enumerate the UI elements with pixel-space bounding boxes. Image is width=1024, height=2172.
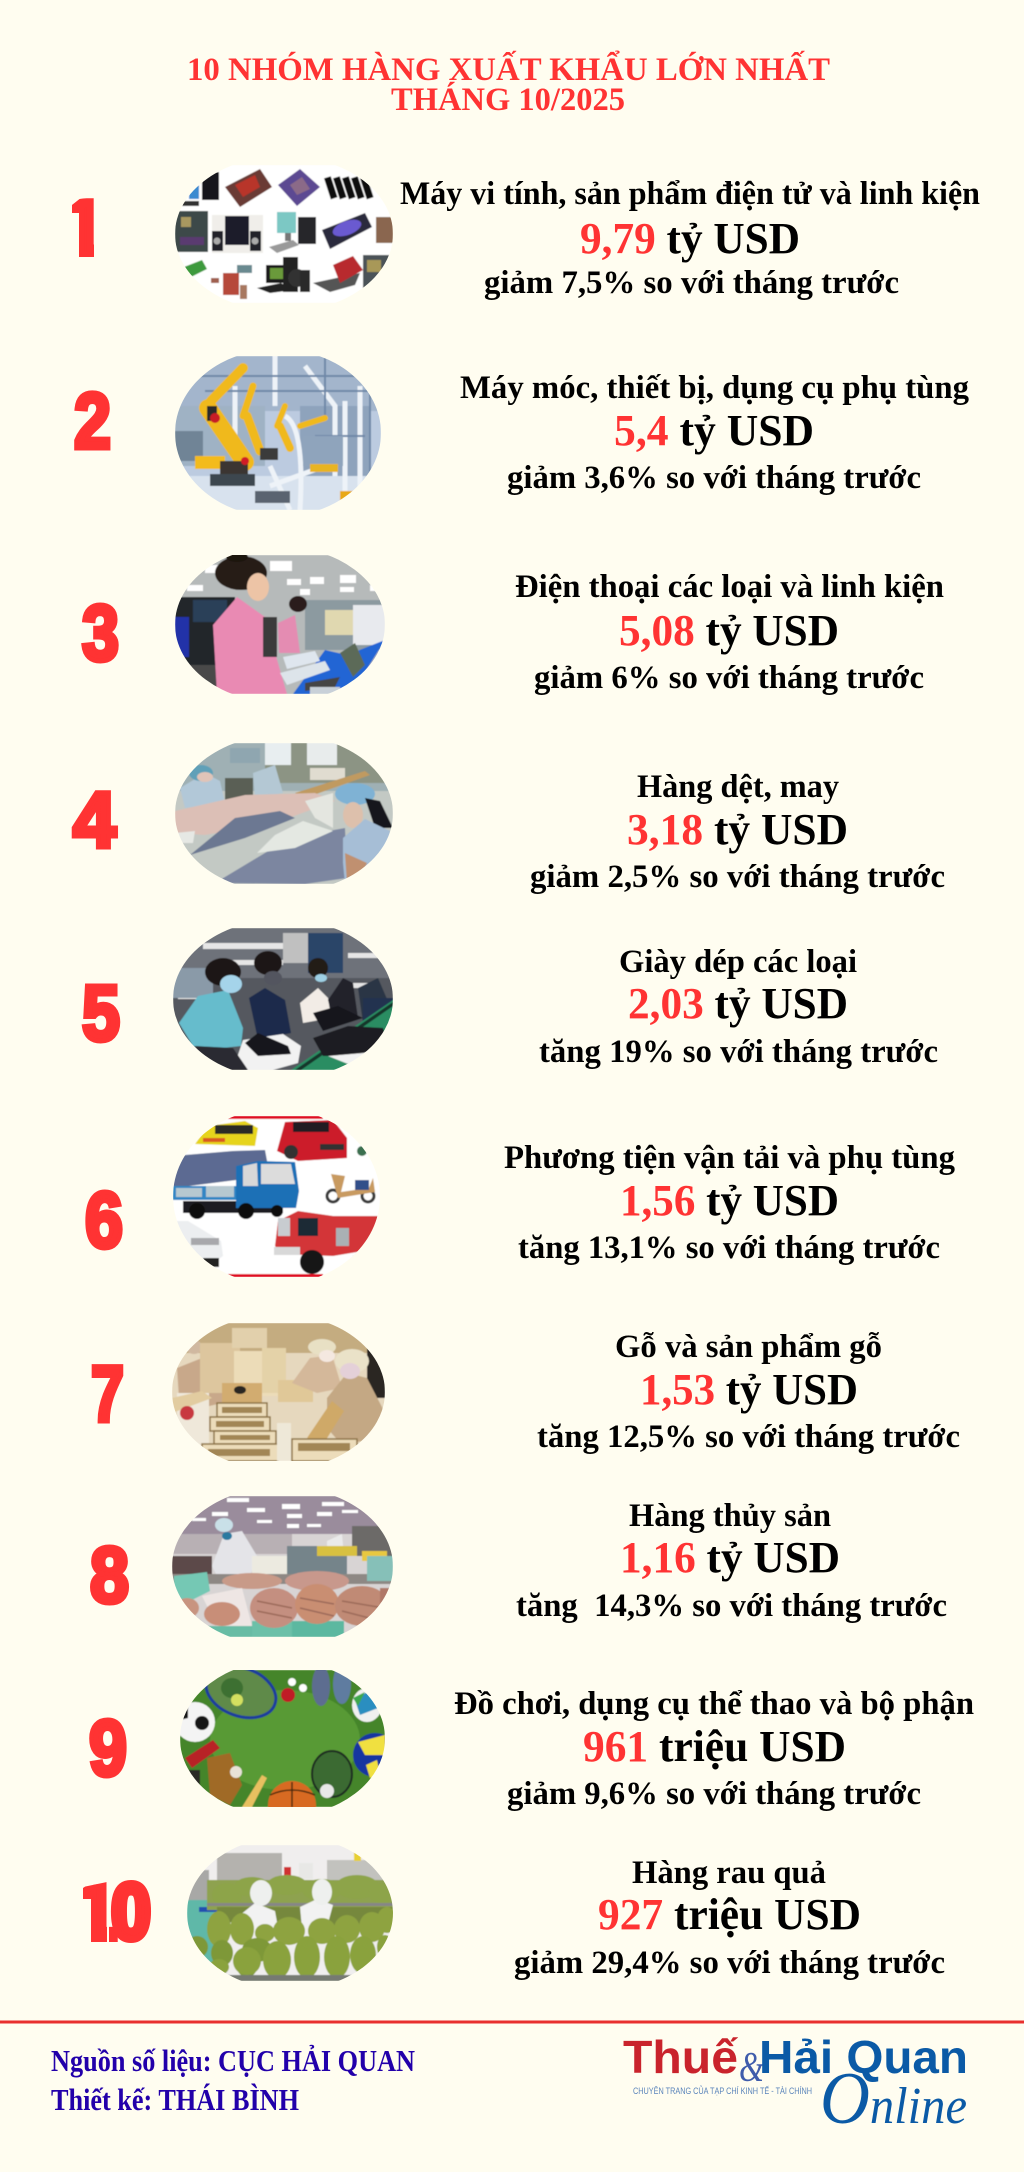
item 5: footwear <box>82 928 938 1070</box>
rank number 7: 7 <box>91 1349 124 1438</box>
item 6: vehicles <box>85 1116 955 1277</box>
product name: Hàng dệt, may <box>637 769 839 805</box>
product name: Hàng thủy sản <box>629 1498 831 1534</box>
item 3: phones <box>82 552 944 696</box>
footer divider <box>0 2020 1024 2024</box>
title: THÁNG 10/2025 <box>391 81 625 118</box>
photo: shoe factory <box>173 928 393 1070</box>
rank number 9: 9 <box>89 1703 127 1792</box>
product name: Máy vi tính, sản phẩm điện tử và linh kiện <box>400 176 980 212</box>
title: 10 NHÓM HÀNG XUẤT KHẨU LỚN NHẤT <box>187 49 830 88</box>
monthly change: tăng 14,3% so với tháng trước <box>516 1588 947 1624</box>
description text <box>515 569 944 696</box>
monthly change: tăng 19% so với tháng trước <box>539 1034 938 1070</box>
product name: Điện thoại các loại và linh kiện <box>515 569 944 605</box>
logo: Thuế & Hải Quan Online <box>623 2031 968 2140</box>
monthly change: giảm 6% so với tháng trước <box>534 660 924 696</box>
logo: Thuế & Hải Quan Online: Online <box>820 2058 967 2140</box>
product name: Giày dép các loại <box>619 944 857 980</box>
item 1: computers and electronics <box>66 165 980 303</box>
logo: Thuế & Hải Quan Online: Thuế <box>623 2031 738 2083</box>
export value: 5,4 tỷ USD <box>614 405 814 455</box>
rank number 10 <box>83 1880 152 1943</box>
product name: Gỗ và sản phẩm gỗ <box>615 1329 882 1365</box>
description text <box>539 944 938 1070</box>
export value: 1,16 tỷ USD <box>620 1532 840 1582</box>
description text <box>516 1498 947 1624</box>
title <box>187 49 830 118</box>
footer credits: Thiết kế: THÁI BÌNH <box>51 2082 299 2117</box>
photo: vehicles <box>173 1116 380 1277</box>
photo: industrial robots <box>175 356 381 510</box>
rank number 5: 5 <box>82 968 120 1057</box>
description text <box>504 1140 955 1266</box>
item 2: machinery <box>74 356 969 510</box>
photo: phone assembly line <box>175 555 385 694</box>
photo: seafood processing <box>172 1496 393 1637</box>
description text <box>460 370 969 496</box>
export value: 2,03 tỷ USD <box>628 978 848 1028</box>
rank number 6: 6 <box>85 1175 123 1264</box>
item 7: wood <box>91 1323 960 1461</box>
description text <box>454 1686 974 1812</box>
photo: durian packing <box>187 1845 393 1981</box>
export value: 5,08 tỷ USD <box>619 605 839 655</box>
monthly change: giảm 9,6% so với tháng trước <box>507 1776 921 1812</box>
rank number 3: 3 <box>82 588 119 677</box>
monthly change: tăng 12,5% so với tháng trước <box>537 1419 960 1455</box>
footer credits: Nguồn số liệu: CỤC HẢI QUAN <box>51 2043 415 2078</box>
monthly change: giảm 2,5% so với tháng trước <box>530 859 945 895</box>
item 4: textiles <box>73 743 945 895</box>
monthly change: tăng 13,1% so với tháng trước <box>518 1230 940 1266</box>
product name: Hàng rau quả <box>632 1855 826 1891</box>
photo: sports equipment <box>180 1670 385 1807</box>
monthly change: giảm 3,6% so với tháng trước <box>507 460 921 496</box>
item 10: fruit and vegetables <box>77 1845 945 1981</box>
export value: 961 triệu USD <box>583 1721 846 1771</box>
export value: 1,56 tỷ USD <box>620 1175 839 1225</box>
photo: wood workshop <box>172 1323 385 1461</box>
description text <box>514 1855 945 1981</box>
item 8: seafood <box>90 1496 947 1637</box>
rank number 10: 1 <box>77 1867 117 1955</box>
export value: 927 triệu USD <box>598 1889 861 1939</box>
export value: 3,18 tỷ USD <box>627 804 848 854</box>
logo: Thuế & Hải Quan Online: Hải Quan <box>759 2031 968 2083</box>
photo: computer parts <box>175 165 393 303</box>
logo: Thuế & Hải Quan Online: & <box>739 2045 764 2091</box>
description text <box>530 769 945 895</box>
rank number 1: 1 <box>66 185 102 274</box>
monthly change: giảm 29,4% so với tháng trước <box>514 1945 945 1981</box>
rank number 8: 8 <box>90 1530 129 1619</box>
rank number 10: 0 <box>111 1867 151 1955</box>
product name: Phương tiện vận tải và phụ tùng <box>504 1140 955 1176</box>
rank number 2: 2 <box>74 376 111 465</box>
monthly change: giảm 7,5% so với tháng trước <box>484 265 899 301</box>
logo: Thuế & Hải Quan Online: CHUYÊN TRANG CỦA TẠP CHÍ KINH TẾ - TÀI CHÍNH <box>633 2085 812 2096</box>
photo: garment factory <box>175 743 393 884</box>
product name: Máy móc, thiết bị, dụng cụ phụ tùng <box>460 370 969 406</box>
description text <box>537 1329 960 1455</box>
item 9: toys and sports <box>89 1670 974 1811</box>
description text <box>400 176 980 301</box>
product name: Đồ chơi, dụng cụ thể thao và bộ phận <box>454 1686 974 1722</box>
export value: 9,79 tỷ USD <box>580 213 800 263</box>
export value: 1,53 tỷ USD <box>640 1364 858 1414</box>
rank number 4: 4 <box>73 775 116 864</box>
footer credits <box>51 2043 415 2117</box>
